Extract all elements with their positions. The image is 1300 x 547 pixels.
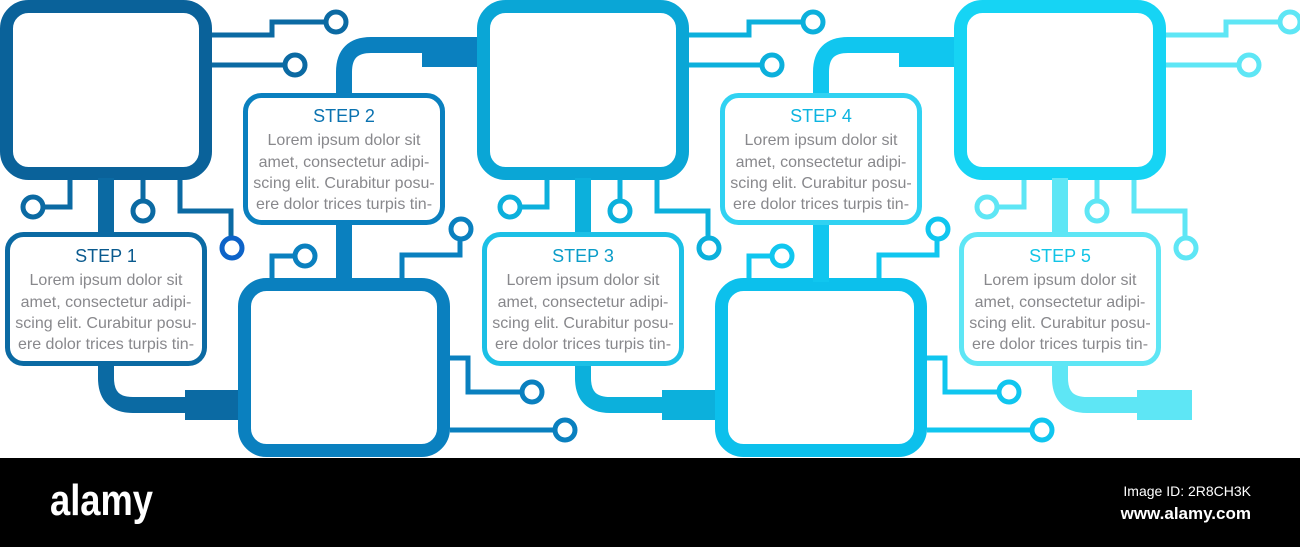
panel: step 2 [244,37,575,450]
website: www.alamy.com [1120,504,1251,523]
step 5 text box: Lorem ipsum dolor sit [984,272,1137,289]
step 3 text box: amet, consectetur adipi- [498,294,668,311]
step 1 text box [8,234,204,364]
step 1 text box: ere dolor trices turpis tin- [18,336,194,353]
step 3 text box: Lorem ipsum dolor sit [507,272,660,289]
step 3 image square [484,6,682,174]
circuit lines [749,219,1052,440]
circuit lines [272,219,575,440]
image id: Image ID: 2R8CH3K [1123,483,1252,499]
step 4 text box: ere dolor trices turpis tin- [733,196,909,213]
panel: step 3 [484,6,823,420]
step 2 image square [244,284,444,450]
step 5 text box: amet, consectetur adipi- [975,294,1145,311]
circuit lines [977,12,1300,258]
step 2 text box: STEP 2 [313,106,375,126]
step 5 image square [960,6,1160,174]
step 1 text box: amet, consectetur adipi- [21,294,191,311]
step 2 text box: amet, consectetur adipi- [259,154,429,171]
step 4 text box: Lorem ipsum dolor sit [745,132,898,149]
circuit lines [23,12,346,258]
circuit lines [500,12,823,258]
step 1 text box: Lorem ipsum dolor sit [30,272,183,289]
step 4 text box: scing elit. Curabitur posu- [730,175,912,192]
step 1 image square [6,6,206,174]
step 1 text box: scing elit. Curabitur posu- [15,315,197,332]
panel: step 1 [6,6,346,420]
step 2 text box: ere dolor trices turpis tin- [256,196,432,213]
logo text: alamy [50,476,153,525]
step 2 text box: Lorem ipsum dolor sit [268,132,421,149]
step 5 text box [962,234,1158,364]
panel: step 5 [960,6,1300,420]
step 4 text box [722,96,920,222]
step 3 text box: scing elit. Curabitur posu- [492,315,674,332]
step 3 text box: STEP 3 [552,246,614,266]
step 1 text box: STEP 1 [75,246,137,266]
step 4 image square [722,284,920,450]
step 2 text box: scing elit. Curabitur posu- [253,175,435,192]
step 4 text box: amet, consectetur adipi- [736,154,906,171]
step 5 text box: ere dolor trices turpis tin- [972,336,1148,353]
step 4 text box: STEP 4 [790,106,852,126]
footer bar [0,458,1300,547]
step 3 text box [484,234,682,364]
step 2 text box [246,96,442,222]
panel: step 4 [722,37,1052,450]
step 5 text box: STEP 5 [1029,246,1091,266]
step 5 text box: scing elit. Curabitur posu- [969,315,1151,332]
step 3 text box: ere dolor trices turpis tin- [495,336,671,353]
